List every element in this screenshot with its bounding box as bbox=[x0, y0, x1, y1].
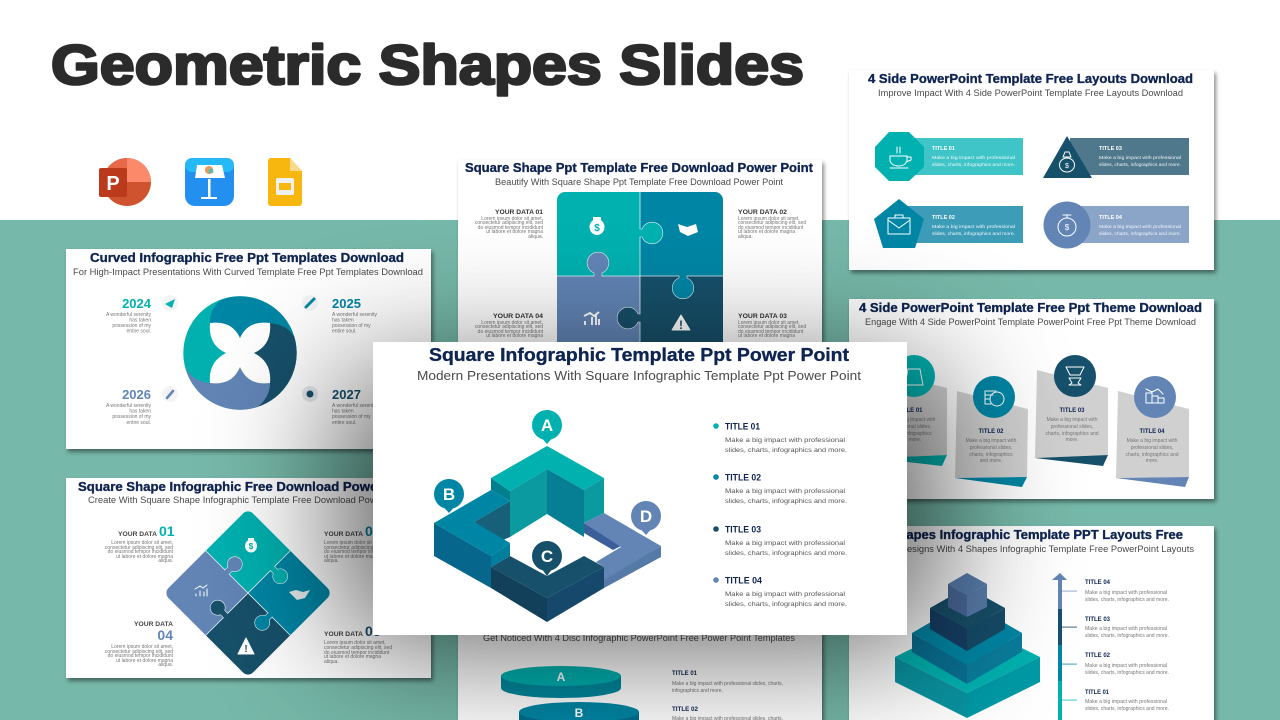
heading: curved slide: Curved Infographic Free Ppt Templates Download bbox=[90, 250, 404, 265]
icon: warning bbox=[238, 638, 254, 655]
text: puzzle your data 02: YOUR DATA 02 bbox=[738, 209, 787, 216]
card: title 03: Make a big impact with bbox=[1047, 417, 1098, 423]
text: puzzle your data 03: ut labore et dolore magna bbox=[738, 333, 795, 339]
card: title 04: charts, infographics and bbox=[1125, 452, 1179, 458]
center slide drop shadow bbox=[343, 372, 937, 645]
text: puzzle your data 04: consectetur adipiscing elit, sed bbox=[475, 324, 543, 330]
card: title 04: professional slides, bbox=[1131, 445, 1173, 451]
item: circle title 04 bbox=[1044, 202, 1189, 248]
text: title 02: TITLE 02 bbox=[1085, 653, 1111, 659]
main title: Geometric Shapes Slides bbox=[51, 33, 804, 96]
text: title 04: TITLE 04 bbox=[1085, 580, 1111, 586]
item: triangle title 03: TITLE 03 bbox=[1099, 146, 1122, 152]
card: title 02: charts, infographics bbox=[969, 452, 1013, 458]
text: your data 04: consectetur adipiscing elit, sed bbox=[105, 649, 173, 655]
label: 2024: has taken bbox=[129, 318, 151, 324]
label: 2027: 2027 bbox=[332, 387, 361, 402]
chart: disc B bbox=[519, 702, 639, 720]
text: your data 01: Lorem ipsum dolor sit amet, bbox=[111, 540, 173, 546]
item: circle title 04: TITLE 04 bbox=[1099, 215, 1123, 221]
text: your data 03: consectetur adipiscing elit, sed bbox=[324, 645, 392, 651]
text: your data 04: ut labore et dolore magna bbox=[116, 658, 173, 664]
label: 2027 bbox=[332, 387, 378, 426]
chart: square puzzle bbox=[557, 192, 723, 342]
chart: disc A bbox=[501, 666, 621, 698]
subheading: 4 side layouts: Improve Impact With 4 Side PowerPoint Template Free Layouts Download bbox=[878, 88, 1183, 98]
icon: PowerPoint: P bbox=[106, 173, 120, 195]
text: puzzle your data 01: aliqua. bbox=[528, 234, 543, 240]
text: your data 02 bbox=[324, 523, 392, 564]
text: your data 01: consectetur adipiscing elit, sed bbox=[105, 545, 173, 551]
chart: disc A: A bbox=[557, 670, 566, 684]
card: title 01: TITLE 01 bbox=[897, 408, 923, 414]
label: 2027: has taken bbox=[332, 408, 354, 414]
label: 2026 bbox=[106, 387, 151, 426]
label: 2024: A wonderful serenity bbox=[106, 312, 151, 318]
list item: title 03: slides, charts, infographics and more. bbox=[725, 550, 847, 557]
text: disc title 01 bbox=[672, 671, 783, 694]
text: disc title 01: Make a big impact with professional slides, charts, bbox=[672, 681, 783, 687]
label: 2024: entire soul. bbox=[127, 328, 151, 334]
text: puzzle your data 02: aliqua. bbox=[738, 234, 753, 240]
label: 2026: A wonderful serenity bbox=[106, 403, 151, 409]
text: title 02: Make a big impact with professional bbox=[1085, 663, 1167, 669]
icon: handshake bbox=[289, 590, 310, 600]
pin: C bbox=[532, 541, 562, 576]
icon: money bag: $ bbox=[249, 542, 254, 551]
icon: chart bars bbox=[195, 585, 207, 596]
panel: 4 side layouts slide bbox=[849, 70, 1214, 270]
label: 2026: entire soul. bbox=[127, 420, 151, 426]
label: 2026: has taken bbox=[129, 408, 151, 414]
panel: curved infographic slide bbox=[66, 249, 431, 449]
text: puzzle your data 01: Lorem ipsum dolor sit amet, bbox=[481, 216, 543, 222]
pin: B: B bbox=[443, 485, 455, 504]
pin: A bbox=[532, 410, 562, 444]
label: 2024: possession of my bbox=[112, 323, 151, 329]
item: pentagon title 02 bbox=[874, 199, 1023, 248]
icon: money bag bbox=[590, 217, 604, 235]
list item: title 03: Make a big impact with professional bbox=[725, 540, 846, 547]
arrow: vertical timeline bbox=[1052, 573, 1077, 720]
list item: title 02 bbox=[713, 472, 847, 505]
chart: disc B: B bbox=[575, 706, 584, 720]
text: your data 03: 03 bbox=[365, 623, 381, 639]
pin: A: A bbox=[541, 416, 553, 435]
text: title 01: TITLE 01 bbox=[1085, 690, 1110, 696]
card: title 02: Make a big impact with bbox=[966, 438, 1017, 444]
list item: title 04: TITLE 04 bbox=[725, 576, 763, 586]
text: title 03 bbox=[1085, 617, 1169, 639]
icon: warning: ! bbox=[679, 318, 683, 332]
label: 2024: 2024 bbox=[122, 296, 152, 311]
label: 2025 bbox=[332, 296, 378, 334]
text: title 04: slides, charts, infographics and more. bbox=[1085, 597, 1169, 603]
text: your data 03: YOUR DATA bbox=[324, 631, 363, 638]
text: your data 04: 04 bbox=[157, 627, 173, 643]
label: 2025: entire soul. bbox=[332, 328, 356, 334]
text: puzzle your data 03: YOUR DATA 03 bbox=[738, 313, 787, 320]
text: puzzle your data 04: Lorem ipsum dolor sit amet, bbox=[481, 320, 543, 326]
item: circle title 04: Make a big impact with professional bbox=[1099, 224, 1181, 229]
text: your data 03: Lorem ipsum dolor sit amet, bbox=[324, 640, 386, 646]
list item: title 02: slides, charts, infographics and more. bbox=[725, 498, 847, 505]
text: your data 04 bbox=[105, 621, 174, 668]
text: your data 01: do eiusmod tempor incididunt bbox=[108, 549, 174, 555]
card: title 01: charts, infographics bbox=[888, 431, 932, 437]
subheading: curved slide: For High-Impact Presentations With Curved Template Free Ppt Templates Download bbox=[73, 267, 423, 277]
card: title 02: and more. bbox=[980, 458, 1002, 464]
label: 2026: 2026 bbox=[122, 387, 151, 402]
text: puzzle your data 01: do eiusmod tempor incididunt bbox=[478, 225, 544, 231]
card: title 02: TITLE 02 bbox=[978, 429, 1004, 435]
text: title 02: slides, charts, infographics and more. bbox=[1085, 670, 1169, 676]
card: title 04: Make a big impact with bbox=[1127, 438, 1178, 444]
list item: title 03 bbox=[713, 524, 847, 557]
text: your data 03 bbox=[324, 623, 392, 665]
list item: title 01: TITLE 01 bbox=[725, 422, 761, 432]
text: puzzle your data 01 bbox=[475, 209, 544, 240]
text: title 03: slides, charts, infographics and more. bbox=[1085, 633, 1169, 639]
icon: warning bbox=[672, 315, 690, 332]
label: 2027: entire soul. bbox=[332, 420, 356, 426]
text: puzzle your data 01: YOUR DATA 01 bbox=[495, 209, 543, 216]
item: triangle title 03 bbox=[1043, 136, 1189, 178]
pin: D bbox=[631, 501, 661, 535]
card: title 02: professional slides, bbox=[970, 445, 1012, 451]
text: puzzle your data 01: consectetur adipiscing elit, sed bbox=[475, 220, 543, 226]
list item: title 02: TITLE 02 bbox=[725, 472, 761, 484]
pin: B bbox=[434, 479, 464, 513]
text: your data 02: aliqua. bbox=[324, 558, 339, 564]
text: puzzle your data 01: ut labore et dolore magna bbox=[486, 229, 543, 235]
heading: center slide: Square Infographic Template Ppt Power Point bbox=[429, 344, 849, 365]
list item: title 01: Make a big impact with professional bbox=[725, 437, 846, 444]
text: puzzle your data 03 bbox=[738, 313, 806, 339]
text: your data 04: Lorem ipsum dolor sit amet, bbox=[111, 644, 173, 650]
label: 2025: A wonderful serenity bbox=[332, 312, 378, 318]
label: 2027: possession of my bbox=[332, 414, 371, 420]
heading: 4 side theme: 4 Side PowerPoint Template Free Ppt Theme Download bbox=[859, 300, 1202, 315]
label: 2026: possession of my bbox=[112, 414, 151, 420]
card: title 01 bbox=[873, 355, 947, 466]
panel: 4 side ppt theme slide bbox=[849, 299, 1214, 499]
item: octagon title 01 bbox=[875, 132, 1023, 181]
item: triangle title 03: $ bbox=[1065, 163, 1069, 170]
text: your data 02: 02 bbox=[365, 523, 381, 539]
list item: title 04: Make a big impact with professional bbox=[725, 591, 846, 598]
text: disc title 01: TITLE 01 bbox=[672, 671, 698, 677]
text: title 01 bbox=[1085, 690, 1169, 712]
text: title 01: Make a big impact with professional bbox=[1085, 699, 1167, 705]
list item: title 04 bbox=[713, 576, 847, 608]
heading: 4 side layouts: 4 Side PowerPoint Template Free Layouts Download bbox=[868, 71, 1193, 86]
block A bbox=[491, 446, 604, 537]
list item: title 03: TITLE 03 bbox=[725, 524, 761, 536]
panel: square shape infographic slide bbox=[66, 478, 431, 697]
item: triangle title 03: Make a big impact with professional bbox=[1099, 155, 1181, 160]
icon: Keynote bbox=[185, 158, 234, 206]
text: your data 01: ut labore et dolore magna bbox=[116, 554, 173, 560]
text: your data 03: ut labore et dolore magna bbox=[324, 654, 381, 660]
text: your data 01: 01 bbox=[159, 523, 175, 539]
text: your data 02: Lorem ipsum dolor sit amet, bbox=[324, 540, 386, 546]
subheading: puzzle slide: Beautify With Square Shape Ppt Template Free Download Power Point bbox=[495, 177, 783, 187]
chart: diamond puzzle bbox=[166, 511, 330, 675]
heading: 4 shapes: 4 Shapes Infographic Template PPT Layouts Free bbox=[879, 527, 1183, 542]
chart: swirl circle bbox=[183, 296, 297, 410]
text: puzzle your data 02: Lorem ipsum dolor sit amet, bbox=[738, 216, 800, 222]
block D bbox=[584, 513, 661, 588]
text: your data 01: YOUR DATA bbox=[118, 531, 157, 538]
icons: four small badges bbox=[162, 295, 318, 402]
item: pentagon title 02: slides, charts, infographics and more. bbox=[932, 231, 1015, 236]
subheading: disc slide: Get Noticed With 4 Disc Infographic PowerPoint Free Power Point Templates bbox=[483, 633, 795, 643]
panel: four disc slide bbox=[458, 560, 822, 720]
item: circle title 04: $ bbox=[1065, 223, 1070, 232]
card: title 03: charts, infographics and bbox=[1045, 431, 1099, 437]
app icons row bbox=[99, 158, 302, 206]
icon: PowerPoint bbox=[99, 158, 151, 206]
text: title 02 bbox=[1085, 653, 1169, 676]
chart: isometric pyramid bbox=[895, 573, 1040, 718]
text: puzzle your data 03: Lorem ipsum dolor sit amet, bbox=[738, 320, 800, 326]
icon: money bag: $ bbox=[594, 223, 600, 234]
icon: handshake bbox=[678, 224, 698, 236]
subheading: 4 side theme: Engage With 4 Side PowerPoint Template PowerPoint Free Ppt Theme Download bbox=[865, 317, 1196, 327]
text: puzzle your data 04 bbox=[475, 313, 544, 339]
item: octagon title 01: slides, charts, infographics and more. bbox=[932, 162, 1015, 167]
pin: D: D bbox=[640, 507, 652, 526]
text: your data 01 bbox=[105, 523, 175, 564]
card: title 03: TITLE 03 bbox=[1059, 408, 1085, 414]
item: triangle title 03: slides, charts, infographics and more. bbox=[1099, 162, 1181, 167]
item: circle title 04: slides, charts, infographics and more. bbox=[1099, 231, 1181, 236]
list item: title 01 bbox=[713, 422, 847, 454]
text: your data 01: aliqua. bbox=[158, 558, 173, 564]
block C bbox=[491, 556, 604, 622]
text: title 04 bbox=[1085, 580, 1169, 603]
icon: chart bbox=[584, 312, 599, 325]
label: 2025: has taken bbox=[332, 318, 354, 324]
icon: warning: ! bbox=[244, 644, 248, 655]
text: your data 04: aliqua. bbox=[158, 662, 173, 668]
label: 2024 bbox=[106, 296, 152, 334]
label: 2025: possession of my bbox=[332, 323, 371, 329]
text: your data 02: YOUR DATA bbox=[324, 531, 363, 538]
text: puzzle your data 04: YOUR DATA 04 bbox=[493, 313, 543, 320]
text: your data 04: YOUR DATA bbox=[134, 621, 173, 628]
card: title 04: more. bbox=[1146, 458, 1158, 464]
text: your data 02: ut labore et dolore magna bbox=[324, 554, 381, 560]
text: title 03: Make a big impact with professional bbox=[1085, 626, 1167, 632]
text: title 04: Make a big impact with professional bbox=[1085, 590, 1167, 596]
item: pentagon title 02: Make a big impact with professional bbox=[932, 224, 1015, 229]
chart: isometric square bbox=[434, 410, 661, 622]
label: 2027: A wonderful serenity bbox=[332, 403, 378, 409]
text: title 03: TITLE 03 bbox=[1085, 617, 1111, 623]
heading: puzzle slide: Square Shape Ppt Template Free Download Power Point bbox=[465, 160, 814, 175]
text: your data 02: do eiusmod tempor incididunt bbox=[324, 549, 390, 555]
heading: diamond slide: Square Shape Infographic Free Download Power Point bbox=[78, 479, 420, 494]
card: title 03: more. bbox=[1066, 437, 1078, 443]
panel: center featured slide bbox=[373, 342, 907, 635]
list item: title 02: Make a big impact with professional bbox=[725, 488, 846, 495]
list item: title 01: slides, charts, infographics and more. bbox=[725, 447, 847, 454]
text: puzzle your data 04: do eiusmod tempor incididunt bbox=[478, 329, 544, 335]
subheading: diamond slide: Create With Square Shape Infographic Template Free Download Power Point bbox=[88, 495, 410, 505]
text: puzzle your data 02: ut labore et dolore magna bbox=[738, 229, 795, 235]
item: octagon title 01: Make a big impact with professional bbox=[932, 155, 1015, 160]
card: title 03 bbox=[1035, 355, 1108, 466]
text: title 01: slides, charts, infographics and more. bbox=[1085, 706, 1169, 712]
text: puzzle your data 02: consectetur adipiscing elit, sed bbox=[738, 220, 806, 226]
text: disc title 02 bbox=[672, 707, 783, 720]
card: title 03: professional slides, bbox=[1051, 424, 1093, 430]
icon: money bag bbox=[245, 538, 257, 552]
subheading: center slide: Modern Presentations With Square Infographic Template Ppt Power Point bbox=[417, 369, 862, 383]
item: octagon title 01: TITLE 01 bbox=[932, 146, 955, 152]
text: disc title 01: infographics and more. bbox=[672, 688, 723, 694]
text: your data 03: do eiusmod tempor incididunt bbox=[324, 650, 390, 656]
text: puzzle your data 02 bbox=[738, 209, 806, 240]
card: title 01: professional slides, bbox=[889, 424, 931, 430]
list item: title 04: slides, charts, infographics and more. bbox=[725, 601, 847, 608]
subheading: 4 shapes: Unique Designs With 4 Shapes Infographic Template Free PowerPoint Layouts bbox=[868, 544, 1195, 554]
label: 2025: 2025 bbox=[332, 296, 361, 311]
card: title 04 bbox=[1116, 376, 1189, 487]
text: your data 03: aliqua. bbox=[324, 659, 339, 665]
text: puzzle your data 04: ut labore et dolore magna bbox=[486, 333, 543, 339]
pin: C: C bbox=[541, 547, 553, 566]
card: title 02 bbox=[955, 376, 1028, 487]
card: title 01: and more. bbox=[899, 437, 921, 443]
panel: 4 shapes slide bbox=[849, 526, 1214, 720]
card: title 04: TITLE 04 bbox=[1139, 429, 1165, 435]
icon: Google Slides bbox=[268, 158, 302, 206]
text: your data 04: do eiusmod tempor incididunt bbox=[108, 653, 174, 659]
card: title 01: Make a big impact with bbox=[885, 417, 936, 423]
block B bbox=[434, 490, 510, 588]
panel: square puzzle slide bbox=[458, 160, 822, 360]
text: puzzle your data 03: do eiusmod tempor incididunt bbox=[738, 329, 804, 335]
text: disc title 02: TITLE 02 bbox=[672, 707, 699, 713]
item: pentagon title 02: TITLE 02 bbox=[932, 215, 955, 221]
text: your data 02: consectetur adipiscing elit, sed bbox=[324, 545, 392, 551]
text: puzzle your data 02: do eiusmod tempor incididunt bbox=[738, 225, 804, 231]
text: puzzle your data 03: consectetur adipiscing elit, sed bbox=[738, 324, 806, 330]
